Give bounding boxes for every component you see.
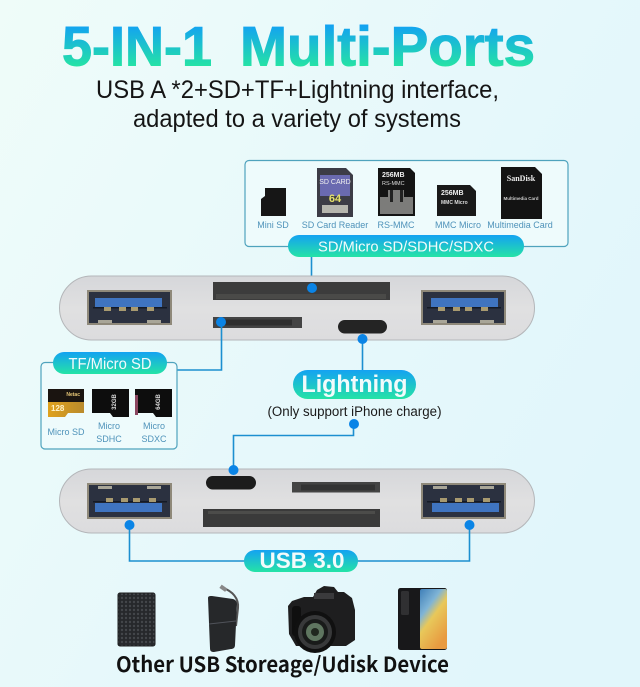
icon: MMC Micro: 256MB <box>441 190 464 197</box>
icon: SD Card Reader: 64 <box>329 193 342 205</box>
icon: RS-MMC: RS-MMC <box>382 181 405 187</box>
port: SD slot <box>203 509 380 527</box>
icon: MMC Micro <box>435 185 481 230</box>
panel: SD card types <box>245 160 568 246</box>
panel: TF card types <box>41 362 177 449</box>
title: Multi-Ports <box>240 14 535 78</box>
icon: Mini SD <box>257 188 289 230</box>
title: 5-IN-1 <box>62 14 212 78</box>
label pill: USB 3.0: USB 3.0 <box>260 548 344 573</box>
port: TF slot <box>213 317 302 328</box>
icon: Micro SDXC card: Micro <box>143 421 165 431</box>
icon: SD Card Reader: SD Card Reader <box>302 220 368 230</box>
label pill: TF: TF/Micro SD <box>68 356 152 373</box>
icon: RS-MMC: RS-MMC <box>378 220 415 230</box>
icon: Micro SDHC card: Micro <box>98 421 120 431</box>
icon: Multimedia Card <box>487 167 553 230</box>
icon: Mini SD: Mini SD <box>257 220 289 230</box>
connector: USB 3.0 <box>124 520 474 561</box>
connector: TF slot <box>177 317 226 370</box>
icon: Micro SD card: Micro SD <box>47 427 85 437</box>
port: Lightning <box>338 320 387 334</box>
label pill: TF <box>53 352 167 374</box>
icon: Multimedia Card: SanDisk <box>507 174 536 183</box>
icon: SD Card Reader <box>302 168 368 230</box>
connector: Lightning top <box>358 334 368 371</box>
note: iPhone charge: (Only support iPhone charge) <box>268 404 442 419</box>
port: Lightning <box>206 476 256 490</box>
icon: RS-MMC <box>378 168 415 230</box>
port: TF slot <box>292 482 380 492</box>
icon: Micro SDHC card: SDHC <box>96 434 122 444</box>
label pill: Lightning: Lightning <box>302 371 408 398</box>
icon: Micro SD card <box>47 389 85 437</box>
port: USB left <box>87 483 172 519</box>
icon: Micro SDXC card: SDXC <box>141 434 167 444</box>
icon: MMC Micro: MMC Micro <box>441 200 468 206</box>
subtitle <box>96 76 499 133</box>
icon: RS-MMC: 256MB <box>382 172 405 179</box>
label pill: SD <box>288 235 524 257</box>
port: SD slot <box>213 282 390 300</box>
port: USB right <box>421 483 506 519</box>
icon: external hard drive <box>118 593 155 646</box>
icon: Multimedia Card: Multimedia Card <box>503 196 539 201</box>
icon: Micro SDXC card: 64GB <box>156 394 162 410</box>
icon: Micro SD card: Netac <box>66 392 80 398</box>
subtitle: USB A *2+SD+TF+Lightning interface, <box>96 76 499 104</box>
connector dot: SD <box>307 283 317 293</box>
icon: Micro SD card: 128 <box>51 404 65 413</box>
port: USB left <box>87 290 172 325</box>
icon: MMC Micro: MMC Micro <box>435 220 481 230</box>
device: hub top view <box>60 276 534 340</box>
icon: SD Card Reader: SD CARD <box>319 179 351 186</box>
icon: Micro SDHC card <box>92 389 129 444</box>
port: USB right <box>421 290 506 325</box>
icon: portable drive with cable <box>208 585 238 652</box>
connector dot: Lightning bottom <box>228 465 238 475</box>
label pill: SD: SD/Micro SD/SDHC/SDXC <box>318 238 494 256</box>
caption: Other USB Storeage/Udisk Device <box>116 649 449 679</box>
subtitle: adapted to a variety of systems <box>133 105 461 133</box>
connector: Lightning bottom <box>234 419 359 470</box>
icon: camera <box>288 586 355 653</box>
icon: Multimedia Card: Multimedia Card <box>487 220 553 230</box>
connector: SD slot <box>310 256 312 288</box>
icon: Micro SDHC card: 32GB <box>112 394 118 410</box>
device: hub bottom view <box>60 469 534 533</box>
icon: Micro SDXC card <box>135 389 172 444</box>
icon: smartphone <box>398 588 447 650</box>
